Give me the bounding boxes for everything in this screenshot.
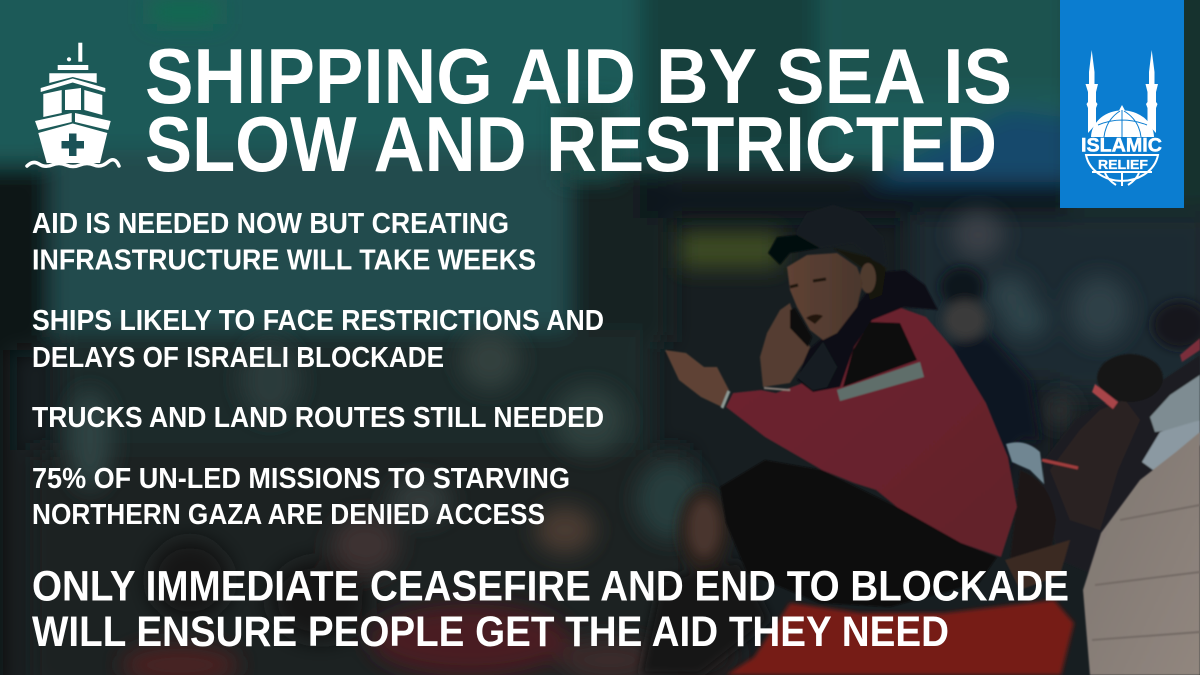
hood [797, 270, 938, 392]
title: SHIPPING AID BY SEA IS [145, 32, 1012, 120]
icon: aid ship [27, 43, 119, 167]
black shoulder panel [843, 322, 917, 387]
bullet: missions denied [32, 463, 570, 531]
bullet: aid needed now: AID IS NEEDED NOW BUT CREATING [32, 208, 509, 240]
person with backpack [1005, 338, 1200, 590]
puffer jacket foreground [1083, 432, 1200, 675]
logo text: ISLAMIC: ISLAMIC [1081, 136, 1162, 156]
cap crown [797, 205, 887, 267]
hair at back of head [833, 248, 886, 300]
logo text: RELIEF: RELIEF [1098, 157, 1148, 172]
bullet: missions denied: NORTHERN GAZA ARE DENIED ACCESS [32, 499, 545, 531]
hand on phone [760, 303, 810, 387]
face [787, 253, 863, 340]
title [145, 32, 1012, 188]
ear [860, 263, 876, 293]
bullet: trucks and land routes: TRUCKS AND LAND ROUTES STILL NEEDED [32, 402, 604, 434]
man on phone [665, 205, 1017, 607]
wristband [722, 391, 729, 408]
medical cross [62, 134, 84, 156]
cap brim [768, 235, 820, 265]
logo panel: Islamic Relief [1060, 0, 1184, 208]
phone [790, 308, 812, 347]
inner jacket [797, 342, 837, 390]
open hand [665, 350, 729, 407]
red bag at bottom [726, 600, 1074, 675]
background figures [640, 267, 1200, 675]
call to action: ONLY IMMEDIATE CEASEFIRE AND END TO BLOCKADE [32, 562, 1069, 610]
red jacket [726, 308, 1017, 557]
bullet: ship restrictions: SHIPS LIKELY TO FACE RESTRICTIONS AND [32, 305, 604, 337]
title: SLOW AND RESTRICTED [145, 100, 997, 188]
eyes and mouth [790, 279, 826, 287]
bullet: ship restrictions [32, 305, 604, 374]
minarets [1086, 50, 1098, 133]
dome [1091, 105, 1154, 137]
call to action [32, 562, 1069, 656]
bullet: aid needed now [32, 208, 536, 276]
bullet: missions denied: 75% OF UN-LED MISSIONS TO STARVING [32, 463, 570, 495]
call to action: WILL ENSURE PEOPLE GET THE AID THEY NEED [32, 608, 949, 656]
grey stripe [837, 362, 924, 401]
bullet: aid needed now: INFRASTRUCTURE WILL TAKE WEEKS [32, 244, 536, 276]
globe outline [1086, 155, 1158, 186]
trousers [720, 460, 997, 607]
bullet: ship restrictions: DELAYS OF ISRAELI BLOCKADE [32, 342, 444, 374]
